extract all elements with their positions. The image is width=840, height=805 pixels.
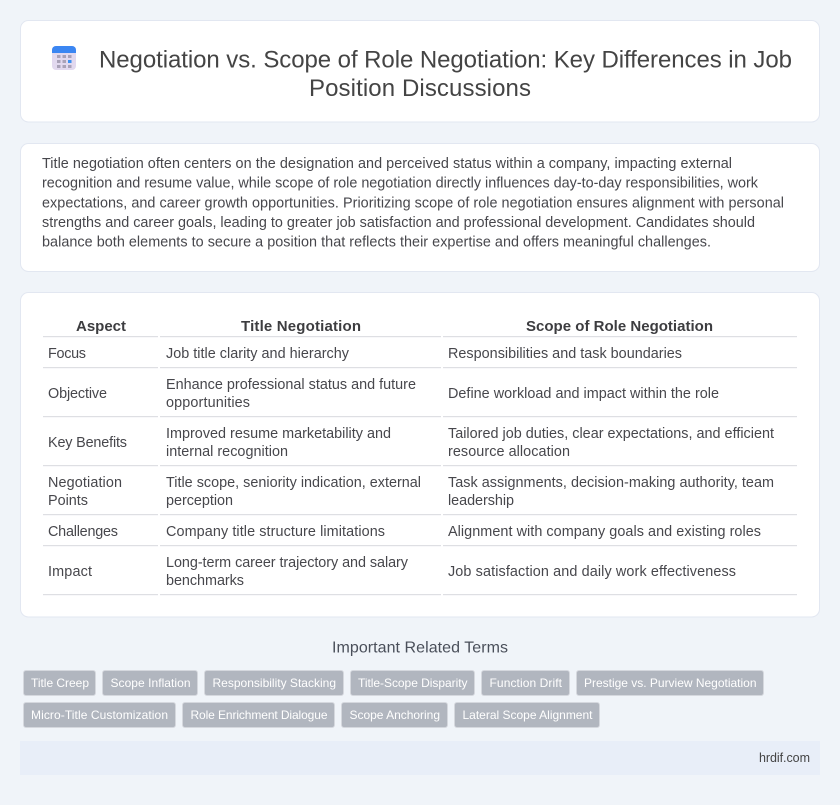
row: challenges: Alignment with company goals and existing roles — [448, 524, 761, 540]
tag list: related terms: Role Enrichment Dialogue — [190, 708, 328, 722]
row: key benefits: Tailored job duties, clear expectations, and efficient — [448, 426, 774, 442]
row: negotiation points: Task assignments, decision-making authority, team — [448, 475, 774, 491]
row: challenges: Company title structure limitations — [166, 524, 385, 540]
panel: intro text: Title negotiation often centers on the designation and perceived status within a company, impacting external — [42, 156, 732, 172]
panel: intro text: expectations, and career growth opportunities. Prioritizing scope of role negotiation ensures alignment with personal — [42, 195, 784, 211]
title — [99, 46, 792, 102]
panel: title header — [20, 20, 820, 122]
tag list: related terms — [24, 670, 764, 728]
row: challenges — [48, 524, 761, 540]
row: key benefits — [48, 426, 774, 460]
row: focus: Focus — [48, 346, 86, 362]
tag list: related terms: Function Drift — [490, 676, 563, 690]
row: impact — [48, 555, 736, 589]
tag list: related terms: Title Creep — [31, 676, 89, 690]
tag list: related terms: Title-Scope Disparity — [358, 676, 468, 690]
tag list: related terms: Prestige vs. Purview Negotiation — [584, 676, 756, 690]
row: impact: benchmarks — [166, 573, 244, 589]
row: negotiation points: Negotiation — [48, 475, 122, 491]
row: negotiation points: leadership — [448, 493, 514, 509]
row: challenges: Challenges — [48, 524, 118, 540]
row: focus: Job title clarity and hierarchy — [166, 346, 350, 362]
panel: intro text: balance both elements to secure a position that reflects their expertise and offers meaningful challenges. — [42, 234, 711, 250]
row: objective: Enhance professional status and future — [166, 377, 416, 393]
heading: related terms: Important Related Terms — [332, 640, 508, 656]
table header: Aspect — [76, 318, 126, 335]
row: impact: Impact — [48, 564, 92, 580]
row: impact: Long-term career trajectory and salary — [166, 555, 409, 571]
tag list: related terms: Scope Anchoring — [350, 708, 440, 722]
row: negotiation points: perception — [166, 493, 233, 509]
row: negotiation points: Title scope, seniority indication, external — [166, 475, 421, 491]
tag list: related terms: Lateral Scope Alignment — [462, 708, 593, 722]
title: Position Discussions — [309, 75, 531, 102]
panel: comparison table — [20, 292, 820, 617]
title: Negotiation vs. Scope of Role Negotiation: Key Differences in Job — [99, 46, 792, 74]
row: objective: Objective — [48, 386, 107, 402]
row: key benefits: resource allocation — [448, 444, 570, 460]
panel: intro text: recognition and resume value, while scope of role negotiation directly influences day-to-day responsibilities, work — [42, 176, 759, 192]
row: key benefits: Improved resume marketability and — [166, 426, 391, 442]
footer — [20, 741, 820, 775]
table header — [76, 318, 713, 335]
icon: calendar — [52, 46, 76, 70]
row: focus — [48, 346, 682, 362]
tag list: related terms: Responsibility Stacking — [212, 676, 336, 690]
footer: hrdif.com — [759, 751, 810, 765]
table header: Scope of Role Negotiation — [526, 318, 713, 335]
row: objective — [48, 377, 719, 411]
row: objective: Define workload and impact within the role — [448, 386, 719, 402]
row: impact: Job satisfaction and daily work effectiveness — [448, 564, 736, 580]
tag list: related terms: Micro-Title Customization — [31, 708, 168, 722]
row: objective: opportunities — [166, 395, 250, 411]
tag list: related terms: Scope Inflation — [110, 676, 190, 690]
row: negotiation points — [48, 475, 774, 509]
row: key benefits: Key Benefits — [48, 435, 127, 451]
table header: Title Negotiation — [241, 318, 361, 335]
panel: intro text — [20, 144, 820, 272]
row: focus: Responsibilities and task boundaries — [448, 346, 682, 362]
row: key benefits: internal recognition — [166, 444, 288, 460]
panel: intro text: strengths and career goals, leading to greater job satisfaction and professional development. Candidates should — [42, 215, 755, 231]
row: negotiation points: Points — [48, 493, 88, 509]
